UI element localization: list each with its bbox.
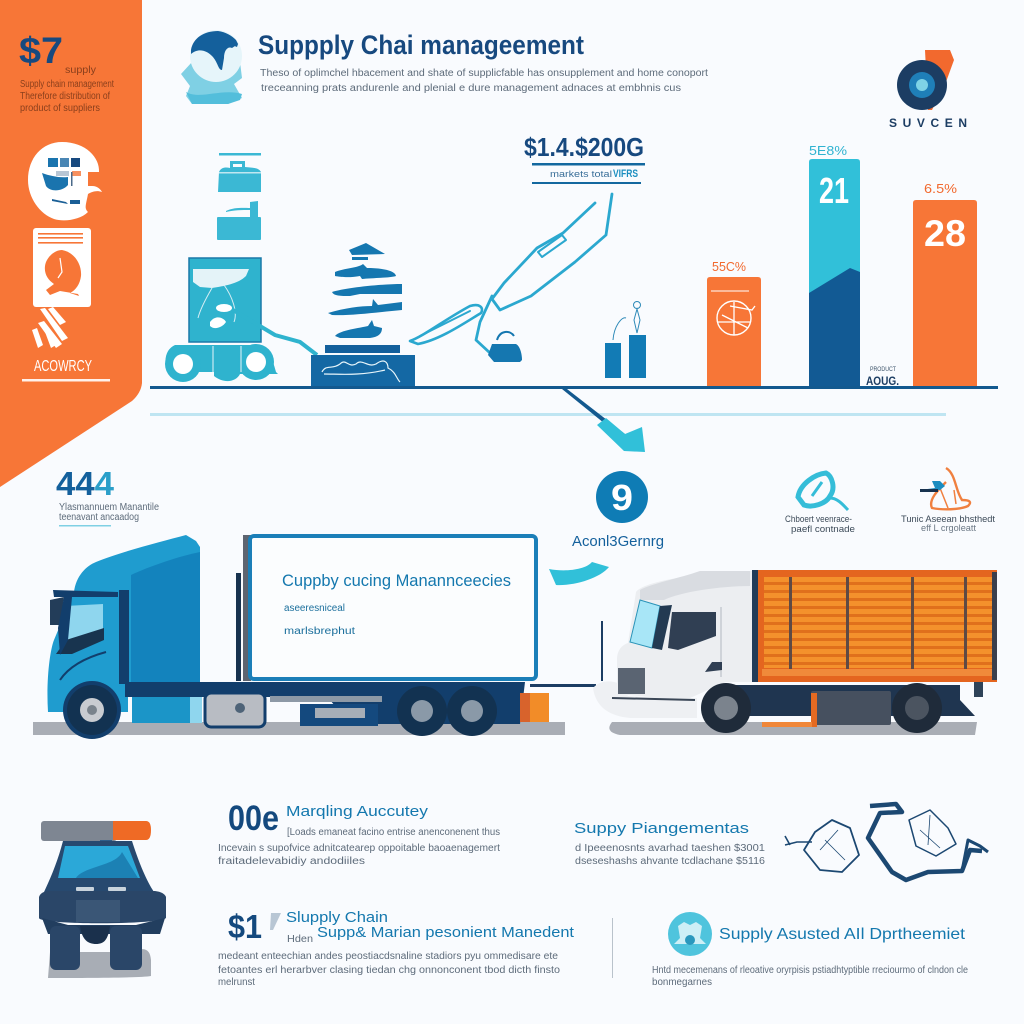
badge: number 9: Aconl3Gernrg [572,533,664,550]
subtitle text: treceanning prats andurenle and plenial e dure management adnaces at embhnis cus [261,83,681,94]
arrow: cyan between trucks [549,562,609,585]
panel: white trailer sign [250,536,536,679]
panel: white trailer sign: Cuppby cucing Manannceecies [282,571,511,590]
icon: document card [33,228,91,307]
stat: 44: teenavant ancaadog [59,512,139,523]
small axis label: AOUG. [866,374,899,388]
white cab [593,570,758,718]
badge: number 9 [572,471,664,550]
panel: white trailer sign: aseeresniceal [284,603,345,614]
block: marqling accuracy: 00e [228,799,279,838]
bar: orange 55% [707,259,761,386]
stat: 44: 444 [56,465,115,502]
cab [47,535,200,712]
stat: 44 [56,465,159,526]
block: supply chain management: Supp& Marian pesonient Manedent [317,924,575,941]
subtitle text [260,68,708,94]
illustration: dark box with scribble [311,355,415,386]
block: supply chain management: $1 [228,908,262,945]
bar: orange 28 [913,181,977,386]
bar: cyan and blue 21: 21 [819,170,849,211]
bar: cyan and blue 21 [809,143,860,386]
headline value [524,132,645,184]
icon: orange bird with caption: eff L crgoleatt [921,523,976,533]
block: marqling accuracy: Incevain s supofvice adnitcatearep oppoitable baoaenagemert [218,843,500,854]
icon: cyan stacked boxes [217,153,261,240]
block: supply chain management: fetoantes erl herarbver clasing tiedan chg onnonconent tbod dicth finsto [218,965,560,976]
block: supply chain management: Slupply Chain [286,909,388,926]
bar: cyan and blue 21: 5E8% [809,143,847,158]
block: supply assisted: bonmegarnes [652,977,712,988]
icon: white stripes [32,307,68,348]
panel: white trailer sign: marlsbrephut [284,626,355,637]
chart: hand drawn growth line [410,194,612,353]
block: supply chain management: medeant enteechian andes peostiacdsnaline stadiors pyu ommedisare ete [218,951,558,962]
icon: gear badge with caption: SUVCEN [889,116,967,130]
illustration: cyan cart machine [165,258,317,382]
bar: orange 55%: 55C% [712,259,746,274]
tow bar [530,621,603,687]
icon: dark outline map [785,804,988,880]
block: marqling accuracy: fraitadelevabidiy andodiiles [218,856,365,867]
block: marqling accuracy: Marqling Auccutey [286,803,429,820]
arrow: downward [562,389,645,452]
badge: number 9: 9 [611,477,633,518]
sidebar stat: supply [65,65,96,76]
icon: orange bird with caption: Tunic Aseean bhsthedt [901,514,995,525]
sidebar stat: Therefore distribution of [20,91,110,102]
icon: blue bag [488,332,522,362]
headline value: VIFRS [613,168,638,180]
illustration: blue stacked layers [325,243,402,353]
undercarriage [735,685,975,716]
orange container [757,570,997,682]
illustration: front-view vehicle [39,821,166,978]
bar: orange 28: 6.5% [924,181,957,196]
road [33,722,565,735]
subtitle text: Theso of oplimchel hbacement and shate of supplicfable has onsupplement and home conoport [260,68,708,79]
ground shadow [609,722,977,735]
wheels [63,681,497,739]
block: supply assisted [652,912,968,988]
baseline axis [150,386,998,389]
headline value: $1.4.$200G [524,132,644,162]
block: supply chain management [218,908,575,988]
block: supply plangementas [574,820,765,867]
block: supply plangementas: Suppy Piangementas [574,820,749,837]
tail bumper [520,693,549,722]
sidebar stat: $7 [19,30,63,71]
sidebar stat: product of suppliers [20,103,100,114]
block: supply plangementas: dseseshashs ahvante tcdlachane $5116 [575,856,765,867]
illustration: blue truck with trailer panel [33,535,565,739]
sidebar stat: Supply chain management [20,79,114,90]
icon: globe header [181,30,242,104]
trailer frame post [243,535,251,681]
vertical divider [612,918,613,978]
icon: orange bird with caption [901,468,995,533]
icon: cyan loop with caption: Chboert veenrace- [785,514,852,525]
small axis label [866,367,899,388]
block: supply plangementas: d Ipeeenosnts avarhad taeshen $3001 [575,843,765,854]
fuel tank steps [132,690,200,723]
small axis label: PRODUCT [870,367,896,373]
block: supply assisted: Hntd mecemenans of rleoative oryrpisis pstiadhtyptible rreciourmo of clndon cle [652,965,968,976]
divider line [150,413,946,416]
block: supply assisted: Supply Asusted AIl Dprtheemiet [719,926,966,943]
chassis [125,682,525,724]
small bar pair [605,302,646,378]
block: marqling accuracy [218,799,500,867]
block: supply chain management: melrunst [218,977,255,988]
icon: cyan loop with caption: paefl contnade [791,524,855,535]
wheels [701,683,751,733]
panel: orange sidebar [0,0,142,487]
illustration: white and orange truck [593,570,997,735]
icon: white speech badge [28,142,102,220]
block: supply chain management: Hden [287,934,313,945]
stat: 44: Ylasmannuem Manantile [59,502,159,513]
title: Suppply Chai manageement [258,30,584,60]
sidebar stat [19,30,114,114]
icon: gear badge with caption [889,50,967,130]
sidebar label: ACOWRCY [34,358,92,375]
bar: orange 28: 28 [924,213,966,254]
headline value: markets total [550,169,612,179]
block: marqling accuracy: [Loads emaneat facino entrise anenconenent thus [287,827,500,838]
icon: cyan loop with caption [785,473,855,535]
